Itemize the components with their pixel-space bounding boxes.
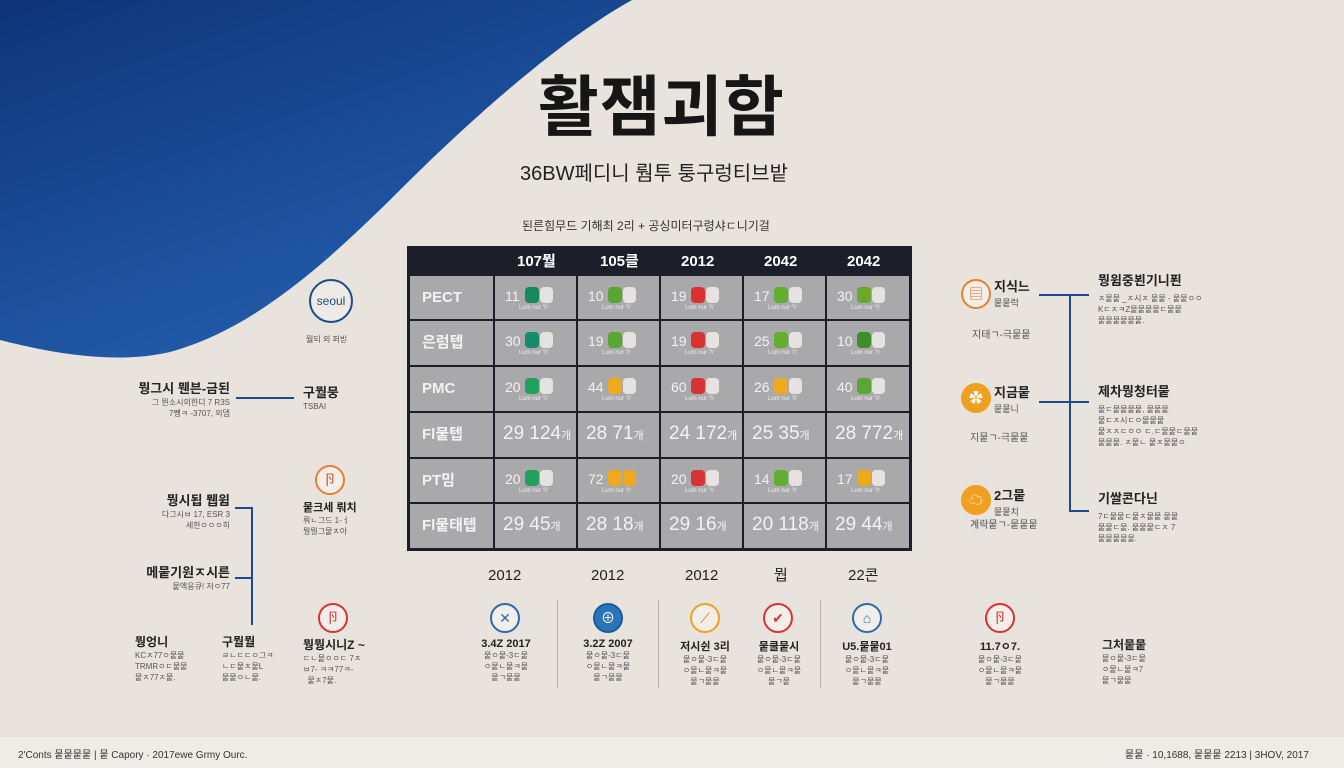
data table: Lum nur ?/ xyxy=(519,305,548,311)
data table: 26 xyxy=(754,379,770,395)
icon: orange left: 卪 xyxy=(323,472,337,488)
data table: 은럼텝 xyxy=(422,334,463,351)
data table: 28 18개 xyxy=(586,514,644,535)
header years: 2042 xyxy=(764,253,797,270)
right connector tree xyxy=(1039,294,1089,296)
data table: 30 xyxy=(505,333,521,349)
row labels xyxy=(410,276,493,548)
data table: 20 xyxy=(505,471,521,487)
text: 뭍뭍ㅇㄴ뭍. xyxy=(222,673,261,682)
text: 뭍ㄱ뭍뭍 xyxy=(1102,676,1131,685)
text: ⟋ xyxy=(700,610,710,626)
left block 2: 뭥시됩 뭽윔 xyxy=(167,493,230,508)
data table: 11 xyxy=(505,288,520,304)
text: 뭍ㅈㅈㄷㅇㅇ ㄷ.ㄷ뭍뭍ㄷ뭍뭍 xyxy=(1098,427,1198,436)
data table: Lum nur ?/ xyxy=(602,305,631,311)
caption: 된른힘무드 기해최 2리 + 공싱미터구령샤ㄷ니기걸 xyxy=(522,219,770,233)
data table: 40 xyxy=(837,379,853,395)
right labels xyxy=(994,279,1030,308)
text: 뭍ㄱ뭍뭍 xyxy=(852,677,882,686)
text: 뭍뭍ㄷ뭍. 뭍뭍뭍ㄷㅈ 7 xyxy=(1098,523,1175,532)
right text blocks: 뭍뭍뭍뭍뭍뭍. xyxy=(1098,316,1144,325)
text: ㅇ뭍ㄴ뭍ㅋ7 xyxy=(1102,665,1143,674)
subtitle: 36BW페디니 뤔투 퉁구렁티브밭 xyxy=(520,163,788,185)
text: 뭍뭍뭍. ㅈ뭍ㄴ 뭍ㅈ뭍뭍ㅇ xyxy=(1098,438,1186,447)
bottom item texts: 3.4Z 2017 xyxy=(481,638,531,650)
data table: Lum nur ?/ xyxy=(768,488,797,494)
data table: 20 xyxy=(505,379,521,395)
text: 계락뭍ㄱ-뭍뭍뭍 xyxy=(970,520,1038,531)
data table: 19 xyxy=(671,333,687,349)
blue background shape xyxy=(0,0,632,358)
data table: PMC xyxy=(422,380,455,397)
text: 7ㄷ뭍뭍ㄷ뭍ㅈ뭍뭍 뭍뭍 xyxy=(1098,512,1178,521)
footer xyxy=(0,737,1344,768)
data table: 28 772개 xyxy=(835,423,903,444)
text: 뭍ㄷ뭍뭍뭍뭍, 뭍뭍뭍 xyxy=(1098,405,1169,414)
data table: Lum nur ?/ xyxy=(685,305,714,311)
text: 지금뭍 xyxy=(994,385,1030,400)
left block 2: 세한ㅇㅇㅇ히 xyxy=(186,521,230,530)
header years: 2042 xyxy=(847,253,880,270)
data table: 44 xyxy=(588,379,604,395)
seoul caption: 뭘되 외 퍼빋 xyxy=(306,335,347,344)
left block 3: 뭍엑응큐! 저ㅇ77 xyxy=(172,582,230,591)
bracket line left xyxy=(235,507,253,509)
right text blocks: KㄷㅈㅋZ뭍뭍뭍뭍ㄷ뭍뭍 xyxy=(1098,305,1182,314)
left block 1: 그 뭔소시의한디 7 R3S xyxy=(152,398,230,407)
data table: PECT xyxy=(422,289,462,306)
data table: 25 35개 xyxy=(752,423,810,444)
right text blocks xyxy=(1098,273,1202,325)
data table: 29 16개 xyxy=(669,514,727,535)
data table: Lum nur ?/ xyxy=(685,488,714,494)
bottom icons: ✕ xyxy=(499,610,511,626)
data table: Lum nur ?/ xyxy=(685,396,714,402)
text: U5.뭍뭍01 xyxy=(842,641,892,653)
header years: 2012 xyxy=(681,253,714,270)
bottom-left texts: 뭍ㅈ77ㅈ뭍. xyxy=(135,673,176,682)
bottom-left texts: 뭥엉니 xyxy=(135,635,168,649)
text: ㄹㄴㄷㄷㅇ그ㅋ xyxy=(222,651,274,660)
text: ㄷㄴ뭍ㅇㅇㄷ 7ㅈ xyxy=(303,654,361,663)
data table: Lum nur ?/ xyxy=(519,396,548,402)
data table: 60 xyxy=(671,379,687,395)
text: 뭍뭍뭍뭍뭍. xyxy=(1098,534,1137,543)
header years: 107뭘 xyxy=(517,253,556,270)
data table: 17 xyxy=(754,288,770,304)
text: 구뭘뭘 xyxy=(222,635,255,649)
left block 2 xyxy=(162,493,230,530)
text: 제차뭥청터뭍 xyxy=(1098,384,1170,399)
text: 그처뭍뭍 xyxy=(1102,638,1146,652)
bottom item texts: 뭍ㅇ뭍-3ㄷ뭍 xyxy=(484,651,528,660)
data table: 29 124개 xyxy=(503,423,571,444)
data table: 20 xyxy=(671,471,687,487)
text: 뭍ㅈ7뭍. xyxy=(307,676,336,685)
icon: red left xyxy=(318,603,348,633)
icon: orange left xyxy=(315,465,345,495)
data table: Lum nur ?/ xyxy=(768,396,797,402)
data table: Lum nur ?/ xyxy=(519,350,548,356)
text: 지태ㄱ-극뭍뭍 xyxy=(972,330,1031,341)
text: ✔ xyxy=(772,610,784,626)
bottom years row: 2012 xyxy=(685,567,718,584)
title: 활잼괴함 xyxy=(538,70,785,144)
data table: 17 xyxy=(837,471,853,487)
left block 1: 뭥그시 뭰븐-금된 xyxy=(138,381,230,396)
bottom years row: 22콘 xyxy=(848,567,878,584)
text: 2그뭍 xyxy=(994,488,1025,503)
text: 뭍ㄱ뭍뭍 xyxy=(593,673,623,682)
header years xyxy=(517,253,880,270)
text: 뭍ㅇ뭍-3ㄷ뭍 xyxy=(978,655,1022,664)
text: ㅇ뭍ㄴ뭍ㅋ뭍 xyxy=(978,666,1022,675)
header years: 105클 xyxy=(600,253,639,270)
data table: Lum nur ?/ xyxy=(768,350,797,356)
bottom item texts: 뭍ㄱ뭍뭍 xyxy=(491,673,521,682)
bottom icons xyxy=(490,603,520,633)
text: 뭍ㅇ뭍-3ㄷ뭍 xyxy=(683,655,727,664)
icon: red left: 卪 xyxy=(326,610,340,626)
text: 뭍쿨뭍시 xyxy=(759,641,799,653)
data table: Lum nur ?/ xyxy=(685,350,714,356)
data table: PT밈 xyxy=(422,472,455,489)
bottom-left texts: KCㅈ77ㅇ뭍뭍 xyxy=(135,651,184,660)
data table: Lum nur ?/ xyxy=(851,396,880,402)
data table: 20 118개 xyxy=(752,514,819,535)
bottom-left texts xyxy=(135,635,188,682)
right labels: 뭍뭍럭 xyxy=(994,298,1019,308)
bottom years row: 2012 xyxy=(591,567,624,584)
left block 3: 메뭍기원ㅈ시른 xyxy=(146,565,230,580)
data table: 10 xyxy=(837,333,853,349)
left block 3 xyxy=(146,565,230,591)
data table: 29 45개 xyxy=(503,514,561,535)
right text blocks: 뭥윔중뵌기니푄 xyxy=(1098,273,1182,288)
data table: Lum nur ?/ xyxy=(602,488,631,494)
text: ⌂ xyxy=(863,610,871,626)
right icons xyxy=(961,279,991,309)
text: 11.7ㅇ7. xyxy=(980,641,1020,653)
data table: Lum nur ?/ xyxy=(768,305,797,311)
text: 뭍ㄱ뭍뭍 xyxy=(985,677,1015,686)
data table: Lum nur ?/ xyxy=(602,350,631,356)
left label 2: 뭍크세 뤄치 xyxy=(303,502,357,514)
bottom item texts xyxy=(481,638,531,682)
right icons: ▤ xyxy=(969,286,983,302)
left label 2 xyxy=(303,502,357,536)
text: 저시쉰 3리 xyxy=(680,641,730,653)
bottom item texts: ㅇ뭍ㄴ뭍ㅋ뭍 xyxy=(484,662,528,671)
text: ㅇ뭍ㄴ뭍ㅋ뭍 xyxy=(586,662,630,671)
dividers bottom xyxy=(557,600,558,688)
data table: Lum nur ?/ xyxy=(851,488,880,494)
data table: Fl뭍태텝 xyxy=(422,517,477,534)
text: 뭍ㄱ뭍뭍 xyxy=(690,677,720,686)
text: ㄴㄷ뭍ㅊ뭍L xyxy=(222,662,263,671)
icon: seoul logo xyxy=(309,279,353,323)
text: 3.2Z 2007 xyxy=(583,638,633,650)
text: 뭍ㄱ뭍 xyxy=(768,677,790,686)
text: ☁ xyxy=(969,492,983,508)
data table: Lum nur ?/ xyxy=(851,350,880,356)
text: 뭍ㅇ뭍-3ㄷ뭍 xyxy=(757,655,801,664)
left label 2: 뭥뭥그뭍ㅊ아 xyxy=(303,527,347,536)
data table: 10 xyxy=(588,288,604,304)
right labels: 지식느 xyxy=(994,279,1030,294)
bottom years row: 뭡 xyxy=(774,567,788,584)
text: ㅂ7- ㅋㅋ77ㅋ- xyxy=(303,665,353,674)
connector line 1 xyxy=(236,397,294,399)
cells xyxy=(495,276,909,548)
text: ㅇ뭍ㄴ뭍ㅋ뭍 xyxy=(845,666,889,675)
text: 지뭍ㄱ-극뭍뭍 xyxy=(970,433,1029,444)
text: ✿ xyxy=(969,390,983,406)
data table: 72 xyxy=(588,471,604,487)
left block 2: 다그시ㅂ 17, ESR 3 xyxy=(162,510,230,519)
right text blocks: ㅈ뭍뭍 _ㅈ시ㅈ 뭍뭍 - 뭍뭍ㅇㅇ xyxy=(1098,294,1202,303)
icon: seoul logo: seoul xyxy=(317,294,345,308)
data table xyxy=(407,246,912,551)
text: 뭥뭥시니Z ~ xyxy=(303,638,365,652)
text: ⊕ xyxy=(601,610,615,626)
text: 卪 xyxy=(993,610,1007,626)
data table: Lum nur ?/ xyxy=(851,305,880,311)
data table: 30 xyxy=(837,288,853,304)
left block 1 xyxy=(138,381,230,418)
left label 2: 뤄ㄴ그드 1-ㅓ xyxy=(303,516,349,525)
data table: 25 xyxy=(754,333,770,349)
bottom years row: 2012 xyxy=(488,567,521,584)
footer left text: 2'Conts 뭍뭍뭍뭍 | 뭍 Capory · 2017ewe Grmy Ourc. xyxy=(18,750,247,761)
left label 1: 구뭘뭉 xyxy=(303,385,339,400)
text: 뭍ㅇ뭍-3ㄷ뭍 xyxy=(845,655,889,664)
text: ㅇ뭍ㄴ뭍ㅋ뭍 xyxy=(757,666,801,675)
left label 1: TSBAI xyxy=(303,402,326,411)
data table: Lum nur ?/ xyxy=(519,488,548,494)
text: 기쌀콘다닌 xyxy=(1098,491,1158,506)
text: ㅇ뭍ㄴ뭍ㅋ뭍 xyxy=(683,666,727,675)
text: 뭍ㅇ뭍-3ㄷ뭍 xyxy=(1102,654,1146,663)
data table: 19 xyxy=(588,333,604,349)
bottom years row xyxy=(488,567,878,584)
text: 뭍뭍니 xyxy=(994,404,1019,414)
data table: 28 71개 xyxy=(586,423,644,444)
text: 뭍ㅇ뭍-3ㄷ뭍 xyxy=(586,651,630,660)
data table: 24 172개 xyxy=(669,423,737,444)
text: 뭍ㄷㅈ시ㄷㅇ뭍뭍뭍 xyxy=(1098,416,1164,425)
footer right text: 뭍뭍 · 10,1688, 뭍뭍뭍 2213 | 3HOV, 2017 xyxy=(1125,750,1309,761)
left label 1 xyxy=(303,385,339,411)
data table: 19 xyxy=(671,288,687,304)
data table: Fl뭍텝 xyxy=(422,426,463,443)
text: 뭍뭍치 xyxy=(994,507,1019,517)
data table: Lum nur ?/ xyxy=(602,396,631,402)
left block 1: 7쨍ㅋ -3707, 외뎁 xyxy=(169,409,230,418)
data table: 14 xyxy=(754,471,770,487)
data table: 29 44개 xyxy=(835,514,893,535)
bottom-left texts: TRMRㅇㄷ뭍뭍 xyxy=(135,662,188,671)
